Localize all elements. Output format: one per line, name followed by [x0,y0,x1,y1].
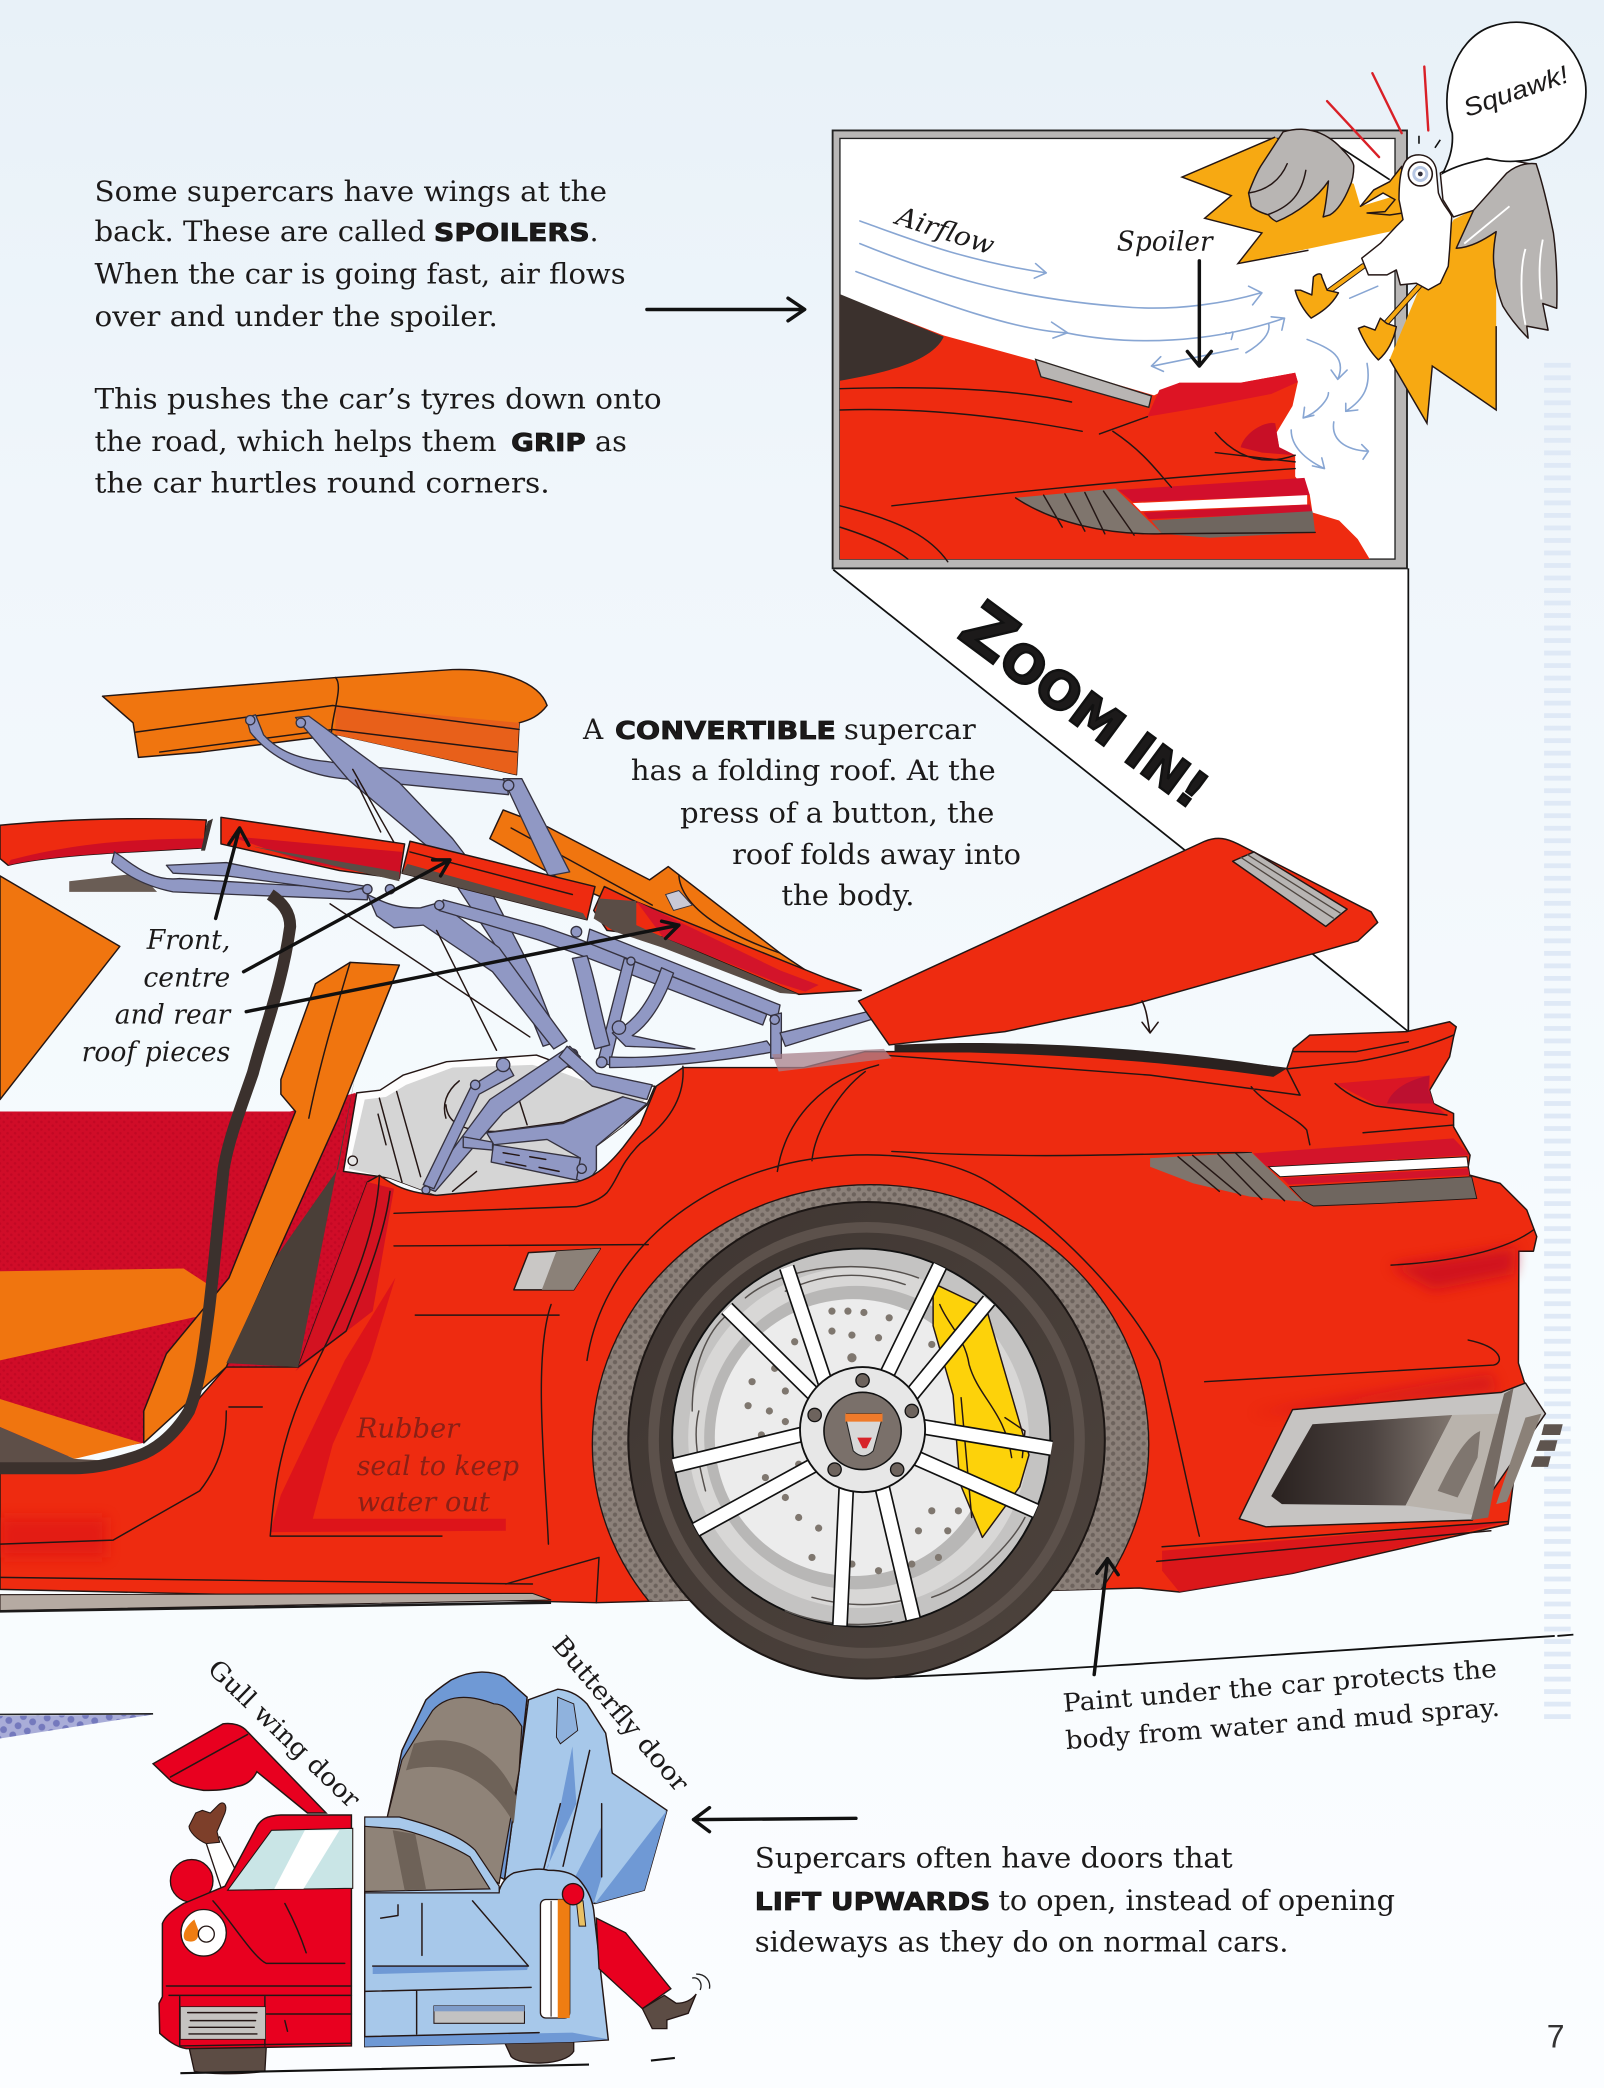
arrow: spoiler [1187,261,1211,366]
label: airflow: Airflow [889,200,998,262]
pivots [246,715,779,1068]
tyre [628,1202,1105,1679]
spokes [674,1266,1052,1625]
intro text: spoilers: over and under the spoiler. [95,300,498,333]
orange door panel [0,876,120,1100]
thin rail upper [439,900,767,1025]
text: convertible: press of a button, the [680,797,994,830]
red half [159,1815,353,2049]
intro text: spoilers: Some supercars have wings at the [95,175,607,208]
arrows: roof pieces [216,828,679,1012]
seat back [144,962,399,1443]
text: convertible: the body. [781,879,914,912]
text: doors: Supercars often have doors that [755,1842,1233,1875]
label: rubber seal: Rubber [356,1414,462,1445]
page number: 7 [1547,2018,1565,2054]
intro text: spoilers: . [590,215,599,248]
leg and boot [596,1918,710,2029]
crimson under-door band [270,1278,506,1532]
sill shadow line [0,1603,551,1611]
linkage arms: convertible mechanism [112,715,888,1068]
arrow: underbody paint [1094,1559,1118,1675]
eye [1408,162,1432,186]
text: convertible: has a folding roof. At the [631,754,996,787]
brake caliper [933,1283,1029,1537]
small car front view [153,1672,710,2074]
text: doors: to open, instead of opening [998,1884,1395,1917]
label: roof pieces: centre [143,962,230,993]
intro text: spoilers [95,175,662,500]
thin rail lower [587,929,780,1018]
ground and wheels [180,2039,675,2074]
label: rubber seal: water out [357,1487,490,1518]
roof piece: front [221,817,405,881]
bay struts [425,1046,580,1191]
intro text: spoilers: When the car is going fast, air flows [95,258,626,291]
rim [672,1249,1050,1627]
taillight [540,1900,570,2018]
rear lid: raised panel [859,838,1378,1045]
label: roof pieces: roof pieces [82,1037,230,1068]
hydraulic cylinder [463,1137,580,1180]
text: doors: sideways as they do on normal cars. [755,1925,1289,1958]
deck seam [895,1043,1287,1077]
legs and feet [1295,266,1419,360]
sill strip [0,1593,551,1611]
right wing [1456,163,1557,338]
left wing [1249,129,1354,222]
right edge print strip [1544,362,1571,1720]
impact lines [1327,67,1428,157]
inset panel: spoiler close-up [833,130,1407,568]
intro text: spoilers: the car hurtles round corners. [95,467,550,500]
car interior: door opening [0,876,386,1468]
label: underbody paint: body from water and mud spray. [1064,1693,1501,1755]
label: butterfly door: Butterfly door [547,1630,695,1798]
wheel [628,1202,1105,1679]
impact burst [1182,132,1496,423]
arrow: to doors [694,1808,856,1832]
bay bracket [487,1097,647,1183]
intro text: spoilers: the road, which helps them [95,425,497,458]
label: gull wing door: Gull wing door [202,1654,367,1814]
text: convertible: supercar [844,713,976,746]
text: convertible: CONVERTIBLE [615,716,836,745]
right vertical arm [598,958,635,1065]
rear taillight [1150,1138,1477,1206]
label: underbody paint [1062,1654,1501,1755]
label: underbody paint: Paint under the car protects the [1062,1654,1498,1718]
thick arm L2 [296,716,559,1046]
intro text: spoilers: as [595,425,627,458]
long ribbed arm [367,895,567,1049]
front rail [112,852,367,900]
arrow: text to inset [647,298,805,321]
upper arm L1 [246,715,508,795]
gull wing door [153,1723,326,1813]
hub [800,1367,925,1492]
text: convertible [582,713,1021,912]
gray engine bay [343,1046,655,1195]
grille opening [1271,1415,1452,1505]
bottom left halftone wedge [0,1714,153,1738]
intro text: spoilers: GRIP [511,428,586,457]
speech bubble [1443,22,1586,173]
linkage at deck [772,1049,892,1072]
label: roof pieces: and rear [115,1000,233,1031]
beak [1360,166,1403,215]
label: roof pieces: Front, [146,925,230,956]
curved arm [572,956,610,1049]
ground line [895,1635,1573,1677]
rear wheel arch: underbody paint [592,1184,1150,1602]
zoom perspective panel [833,568,1408,1032]
label: rubber seal [356,1414,519,1518]
arm with thumb up [189,1803,236,1890]
body details [0,1035,1533,1603]
text: doors: LIFT UPWARDS [755,1887,990,1916]
small motion arrow [1142,1001,1158,1033]
body [1362,155,1452,290]
rear roof pieces [221,817,861,994]
side intake [514,1249,600,1290]
airflow lines [856,221,1378,469]
intro text: spoilers: This pushes the car’s tyres down onto [95,383,662,416]
curved brace [612,968,695,1049]
text: convertible: A [582,713,604,746]
bird: seagull with speech bubble [1182,22,1586,423]
middle open roof panel: orange [490,810,832,988]
intro text: spoilers: SPOILERS [434,218,590,247]
label: rubber seal: seal to keep [357,1451,519,1482]
text: doors [755,1842,1395,1958]
blue half [365,1817,608,2047]
deck rail [780,1008,888,1046]
speech: squawk: Squawk! [1460,61,1572,123]
lower horizontal [610,1041,775,1068]
zoom in lettering: ZOOM IN! [946,586,1228,823]
shoulder [1440,158,1529,217]
inset car body [840,294,1370,562]
label: roof pieces [82,925,233,1068]
rubber door seal [0,895,290,1468]
rear exhaust grille [1239,1383,1563,1527]
butterfly door [387,1672,667,1904]
main car body [0,1022,1537,1603]
text: convertible: roof folds away into [732,838,1021,871]
rear open roof panel: orange [102,669,547,775]
windscreen arch [0,819,213,892]
intro text: spoilers: back. These are called [95,215,426,248]
brake disc holes [744,1308,962,1574]
label: spoiler: Spoiler [1117,226,1215,257]
thick arm L3 [503,779,570,876]
hinge [771,1013,781,1058]
roof piece: rear [594,887,861,994]
lid vent [1233,852,1347,926]
roof piece: centre [402,841,595,920]
thin cables [330,769,530,1050]
